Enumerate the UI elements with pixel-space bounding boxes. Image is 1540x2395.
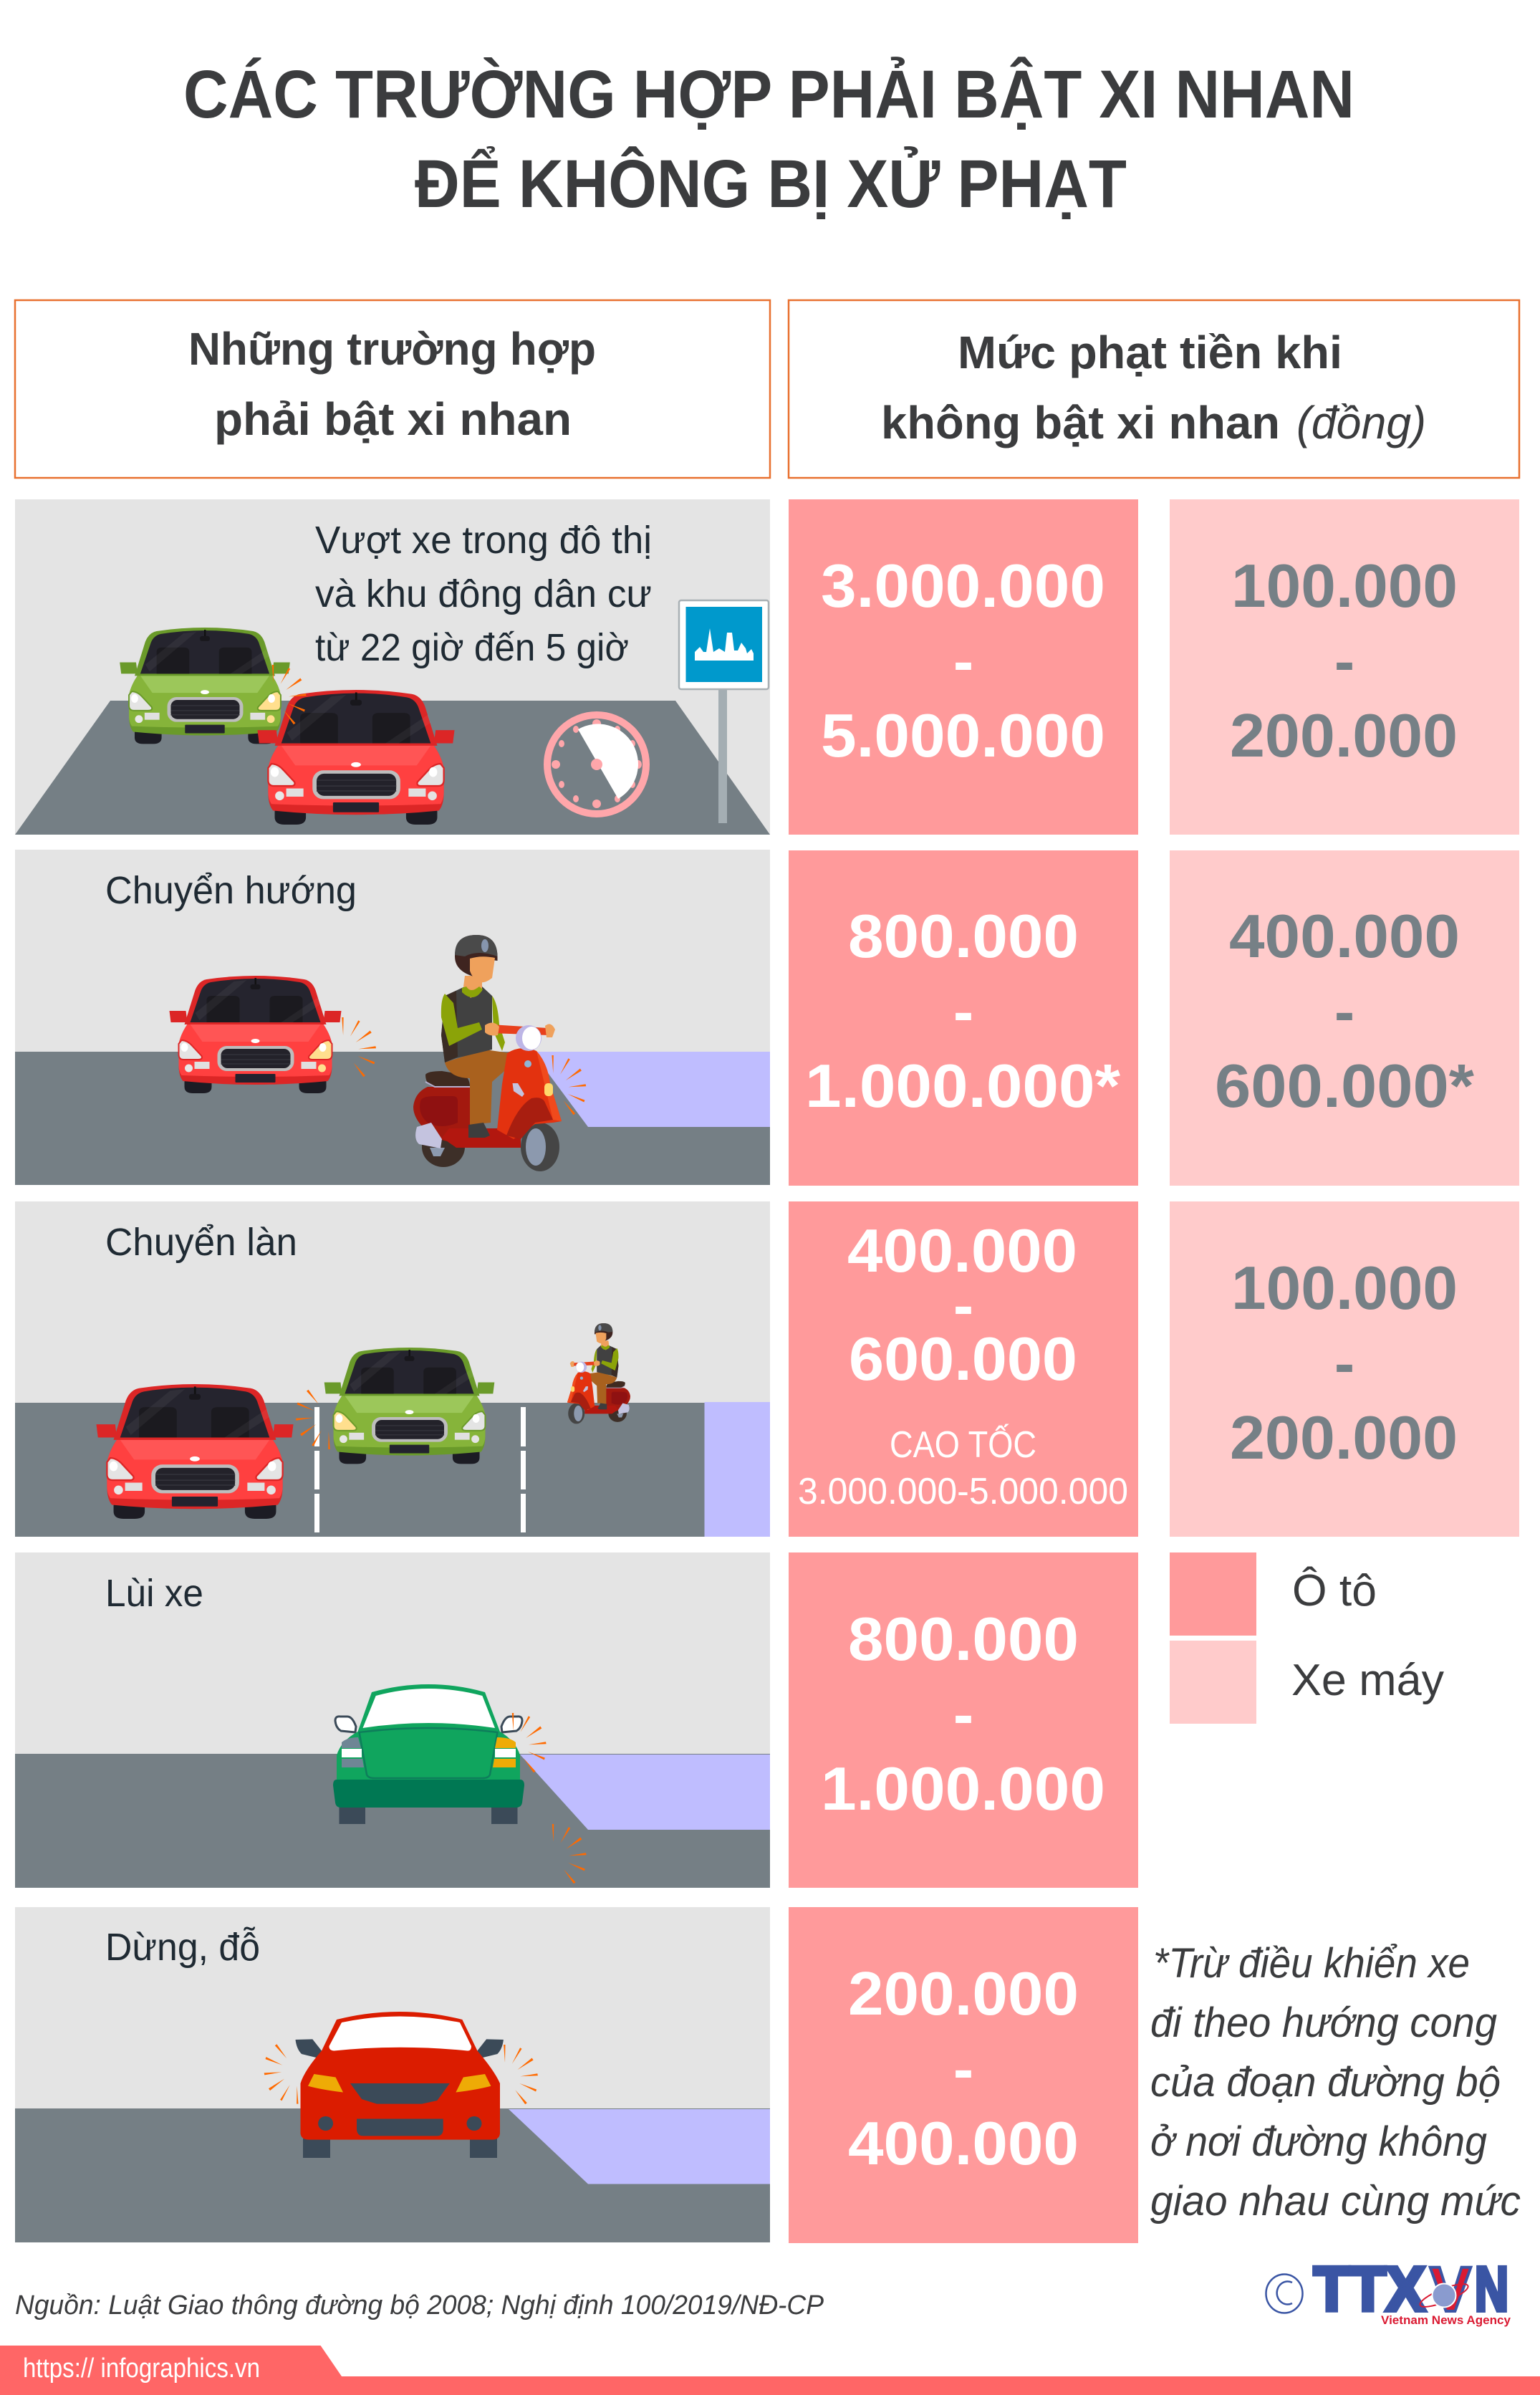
- fine: car reversing: [789, 1552, 1138, 1888]
- icon: signal sparks: [296, 1390, 330, 1449]
- footnote: *Trừ điều khiển xe: [1153, 1940, 1470, 1987]
- icon: urban area sign: [679, 600, 769, 823]
- fine: car reversing: -: [953, 1681, 973, 1749]
- fine: car changing direction: [789, 850, 1138, 1186]
- fine: car reversing: 1.000.000: [821, 1755, 1105, 1823]
- logo: TTXVN: TTX: [1314, 2255, 1425, 2324]
- footer bar: [0, 2346, 1540, 2395]
- fine: car changing lanes: 600.000: [849, 1325, 1077, 1393]
- title: ĐỂ KHÔNG BỊ XỬ PHẠT: [415, 146, 1127, 222]
- fine: motorbike overtaking: [1170, 499, 1519, 835]
- road: [15, 701, 770, 835]
- text: overtaking: Vượt xe trong đô thị: [315, 519, 652, 562]
- fine: car changing direction: 1.000.000*: [805, 1052, 1120, 1120]
- fine: car stopping and parking: -: [953, 2035, 973, 2103]
- panel: stopping and parking: [15, 1907, 770, 2242]
- header: situations column: Những trường hợp: [188, 323, 596, 375]
- side road: [509, 2109, 770, 2184]
- text: changing lanes: Chuyển làn: [105, 1221, 297, 1264]
- legend: [1170, 1552, 1444, 1724]
- header: fines column: (đồng): [1296, 397, 1426, 448]
- icon: clock: [547, 715, 646, 814]
- footnote: giao nhau cùng mức: [1150, 2178, 1521, 2224]
- fine: car changing direction: -: [953, 978, 973, 1046]
- logo: TTXVN: V: [1430, 2253, 1471, 2325]
- panel: changing lanes: [15, 1201, 770, 1537]
- logo: TTXVN: N: [1475, 2255, 1508, 2324]
- icon: small scooter rider: [567, 1323, 630, 1424]
- fine: car stopping and parking: 400.000: [848, 2110, 1079, 2178]
- icon: turn signal sparks: [272, 665, 307, 724]
- panel: reversing: [15, 1552, 770, 1888]
- title: CÁC TRƯỜNG HỢP PHẢI BẬT XI NHAN: [183, 57, 1354, 133]
- fine: car changing lanes: -: [953, 1272, 973, 1340]
- fine: car stopping and parking: [789, 1907, 1138, 2243]
- fine: car overtaking: [789, 499, 1138, 835]
- fine: car changing direction: 800.000: [848, 903, 1079, 971]
- footnote: đi theo hướng cong: [1150, 2000, 1497, 2046]
- fine: car changing lanes: 400.000: [847, 1217, 1077, 1285]
- side road: [520, 1755, 770, 1830]
- fine: car changing lanes: CAO TỐC: [890, 1424, 1036, 1466]
- fine: car changing lanes: [789, 1201, 1138, 1537]
- fine: motorbike changing direction: -: [1334, 978, 1354, 1046]
- panel: changing direction: [15, 850, 770, 1185]
- fine: motorbike overtaking: -: [1334, 628, 1354, 696]
- text: overtaking: và khu đông dân cư: [315, 572, 652, 615]
- fine: motorbike changing direction: 600.000*: [1215, 1052, 1474, 1120]
- fine: motorbike overtaking: 100.000: [1231, 552, 1458, 620]
- fine: car overtaking: 3.000.000: [821, 552, 1105, 620]
- side road: [532, 1052, 770, 1127]
- icon: red car front view: [295, 2012, 504, 2158]
- fine: motorbike changing direction: [1170, 850, 1519, 1186]
- header: situations column: phải bật xi nhan: [214, 393, 572, 445]
- fine: car overtaking: 5.000.000: [821, 702, 1105, 770]
- source: Nguồn: Luật Giao thông đường bộ 2008; Nghị định 100/2019/NĐ-CP: [15, 2290, 824, 2320]
- fine: car overtaking: -: [953, 628, 973, 696]
- fine: motorbike changing lanes: [1170, 1201, 1519, 1537]
- road: [15, 1754, 770, 1888]
- side road: [705, 1402, 770, 1537]
- text: overtaking: [315, 519, 652, 669]
- fine: motorbike overtaking: 200.000: [1230, 702, 1458, 770]
- road: [15, 2108, 770, 2242]
- fine: motorbike changing direction: 400.000: [1229, 903, 1460, 971]
- footnote: của đoạn đường bộ: [1150, 2059, 1501, 2106]
- fine: car changing lanes: 3.000.000-5.000.000: [798, 1471, 1128, 1512]
- text: stopping and parking: Dừng, đỗ: [105, 1926, 260, 1969]
- fine: motorbike changing lanes: 200.000: [1230, 1404, 1458, 1472]
- icon: car signal sparks: [342, 1017, 376, 1077]
- lane markings: [314, 1407, 526, 1532]
- footnote: ở nơi đường không: [1150, 2118, 1487, 2165]
- icon: green car: [324, 1348, 494, 1464]
- footnote: [1150, 1940, 1521, 2224]
- legend: Ô tô: [1292, 1566, 1377, 1616]
- icon: right signal sparks: [504, 2045, 538, 2104]
- road: [15, 1403, 770, 1537]
- road: [15, 1052, 770, 1185]
- title: [183, 57, 1354, 222]
- logo: TTXVN: Vietnam News Agency: [1381, 2313, 1511, 2327]
- header: situations column: [15, 300, 770, 478]
- icon: car signal sparks: [512, 1713, 547, 1772]
- panel: overtaking in urban area at night: [15, 499, 770, 835]
- icon: road signal sparks: [552, 1824, 587, 1883]
- fine: car stopping and parking: 200.000: [848, 1960, 1079, 2028]
- icon: green car rear view: [333, 1684, 524, 1824]
- icon: red car: [257, 690, 455, 825]
- header: fines column: Mức phạt tiền khi: [958, 327, 1342, 378]
- fine: motorbike changing lanes: 100.000: [1231, 1254, 1458, 1323]
- fine: motorbike changing lanes: -: [1334, 1330, 1354, 1398]
- fine: car reversing: 800.000: [848, 1606, 1079, 1674]
- icon: red car: [169, 976, 341, 1093]
- icon: red car: [96, 1384, 294, 1519]
- legend: Xe máy: [1291, 1656, 1444, 1705]
- icon: left signal sparks: [264, 2044, 298, 2104]
- icon: green car: [120, 628, 290, 744]
- icon: scooter signal sparks: [552, 1055, 586, 1115]
- header: fines column: không bật xi nhan: [881, 397, 1280, 448]
- icon: scooter rider: [413, 935, 562, 1171]
- logo: TTXVN: [1266, 2253, 1511, 2327]
- text: overtaking: từ 22 giờ đến 5 giờ: [315, 626, 629, 669]
- header: fines column: [789, 300, 1519, 478]
- text: reversing: Lùi xe: [105, 1572, 203, 1615]
- footer bar: https:// infographics.vn: [23, 2353, 260, 2384]
- text: changing direction: Chuyển hướng: [105, 869, 357, 912]
